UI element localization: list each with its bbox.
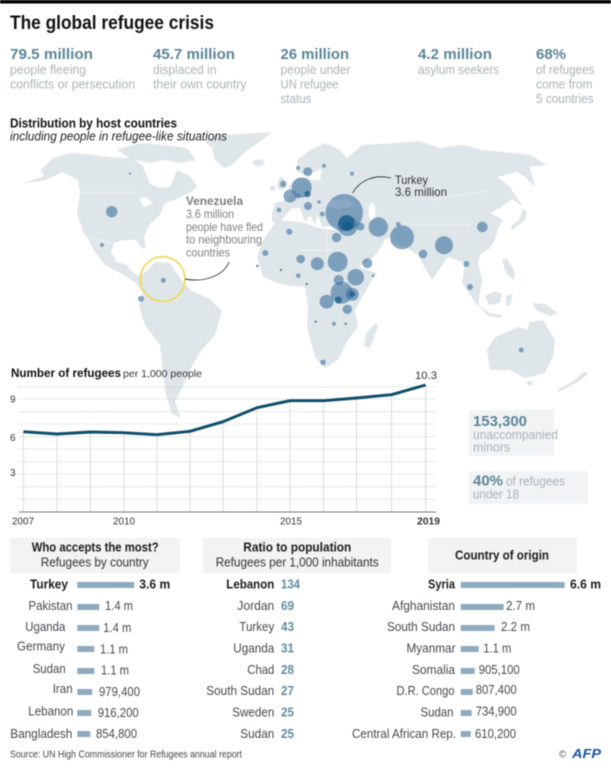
values: 807,400 [476, 683, 517, 697]
country labels: Central African Rep. [352, 727, 456, 741]
country labels: Turkey [239, 620, 275, 634]
source note: Source: UN High Commissioner for Refugees annual report [10, 750, 242, 760]
callout: unaccompanied minors: unaccompanied [473, 428, 558, 442]
ratio values: 69 [281, 599, 294, 613]
bars [77, 582, 134, 737]
callout: Venezuela text [186, 194, 263, 260]
stat: 26 million [280, 47, 350, 106]
line chart: number of refugees [10, 366, 440, 528]
ratio values: 134 [281, 578, 300, 592]
map heading: Distribution by host countries [10, 116, 177, 130]
data line [23, 385, 426, 435]
country labels [352, 578, 456, 741]
country labels: Lebanon [226, 578, 274, 592]
arrow: Venezuela leader line [185, 262, 229, 280]
values: 1.4 m [105, 599, 133, 613]
country labels: Sweden [232, 706, 274, 720]
panel heading: Who accepts the most? [32, 540, 159, 554]
values [475, 578, 601, 741]
values: 854,800 [96, 727, 137, 741]
stat: 79.5 million: people fleeing [10, 63, 86, 77]
country labels: Uganda [25, 620, 65, 634]
inland seas and borders [80, 166, 490, 262]
values: 3.6 m [139, 578, 170, 592]
panel heading: Country of origin [455, 548, 549, 562]
y axis labels: 9 [10, 394, 16, 406]
x axis labels [12, 516, 440, 528]
country labels: D.R. Congo [396, 684, 455, 698]
AFP credit: © [559, 750, 567, 760]
stat: 68%: of refugees [536, 63, 594, 77]
values: 610,200 [475, 727, 516, 741]
chart heading: Number of refugees [11, 366, 121, 380]
stat: 45.7 million: 45.7 million [153, 47, 235, 63]
callout: 40% under 18: 40% [473, 474, 503, 490]
panel: ratio to population [203, 538, 391, 741]
country labels: Myanmar [406, 642, 456, 656]
map heading: including people in refugee-like situations [10, 130, 227, 144]
stat: 45.7 million [153, 47, 247, 92]
country labels: South Sudan [387, 620, 455, 634]
country labels [206, 578, 275, 741]
values: 2.2 m [501, 620, 530, 634]
panel heading [203, 538, 391, 573]
panel heading: Ratio to population [243, 540, 351, 554]
panel: who accepts the most [10, 538, 180, 741]
title: The global refugee crisis [10, 13, 214, 34]
world map [22, 132, 588, 418]
values [96, 578, 170, 741]
stat: 79.5 million: 79.5 million [10, 47, 93, 63]
country labels: Somalia [412, 663, 455, 677]
panel heading [10, 538, 180, 573]
values: 734,900 [476, 704, 517, 718]
country labels: Bangladesh [10, 727, 72, 741]
values: 979,400 [99, 685, 140, 699]
callout: Venezuela text: Venezuela [186, 194, 243, 208]
ratio values: 25 [281, 727, 294, 741]
values: 6.6 m [570, 578, 601, 592]
arrow: Turkey leader line [353, 177, 391, 193]
values: 916,200 [98, 706, 139, 720]
map heading [10, 116, 227, 144]
ratio values: 25 [281, 706, 294, 720]
country labels: Afghanistan [392, 599, 455, 613]
stat: 26 million: status [280, 92, 312, 106]
callout: 40% under 18: of refugees [506, 474, 565, 488]
values: 1.1 m [100, 642, 128, 656]
country labels: Sudan [240, 727, 274, 741]
country labels: Syria [428, 578, 456, 592]
country labels: Turkey [30, 578, 68, 592]
x axis labels: 2010 [113, 516, 135, 528]
country labels: Uganda [233, 642, 274, 656]
country labels: Lebanon [28, 704, 73, 718]
callout: Venezuela text: 3.6 million [186, 207, 234, 221]
values: 2.7 m [506, 599, 535, 613]
stat: 4.2 million: 4.2 million [418, 47, 492, 63]
callout: Venezuela highlight circle [140, 257, 185, 301]
top black bar [0, 0, 611, 4]
values: 1.1 m [101, 664, 129, 678]
callout: Turkey text: 3.6 million [395, 185, 447, 199]
country labels: Jordan [237, 599, 274, 613]
land masses [22, 132, 588, 418]
stat: 79.5 million [10, 47, 135, 92]
chart heading: per 1,000 people [123, 368, 202, 380]
panel heading: Refugees by country [41, 556, 149, 570]
stat: 68%: 5 countries [536, 92, 594, 106]
end value label: 10.3 [415, 370, 437, 382]
callout: unaccompanied minors: minors [473, 440, 510, 454]
stat: 68%: come from [536, 78, 592, 92]
stat: 68%: 68% [536, 47, 566, 63]
x axis labels: 2007 [12, 516, 34, 528]
stat: 26 million: people under [280, 63, 350, 77]
callout: 40% under 18 [469, 471, 588, 504]
country labels: Pakistan [28, 599, 73, 613]
callout: Venezuela text: to neighbouring [186, 232, 262, 246]
stat: 26 million: 26 million [280, 47, 349, 63]
chart heading [11, 366, 202, 380]
panel: country of origin [352, 538, 601, 741]
values: 1.1 m [483, 642, 511, 656]
country labels: South Sudan [206, 684, 274, 698]
callout: Turkey text [395, 173, 447, 199]
panel heading [428, 538, 577, 573]
y axis labels [10, 394, 16, 479]
country labels: Sudan [33, 662, 66, 676]
y axis labels: 6 [10, 433, 16, 444]
stat: 68% [536, 47, 594, 106]
ratio values: 31 [281, 642, 294, 656]
ratio values [281, 578, 300, 741]
ratio values: 43 [281, 620, 294, 634]
country labels: Sudan [420, 706, 454, 720]
callout: Venezuela text: countries [186, 246, 230, 260]
stat: 45.7 million: their own country [153, 78, 247, 92]
stat: 4.2 million: asylum seekers [418, 63, 499, 77]
callout: Venezuela text: people have fled [186, 220, 263, 234]
stat: 26 million: UN refugee [280, 78, 339, 92]
callout: Turkey text: Turkey [395, 173, 428, 187]
callout: unaccompanied minors [469, 410, 558, 456]
stat: 4.2 million [418, 47, 499, 77]
ratio values: 27 [281, 684, 294, 698]
panel heading: Refugees per 1,000 inhabitants [216, 556, 379, 570]
AFP credit: AFP [571, 746, 601, 761]
y axis labels: 3 [10, 468, 16, 479]
country labels: Iran [53, 682, 73, 696]
values: 1.4 m [103, 621, 131, 635]
stat: 45.7 million: displaced in [153, 63, 217, 77]
AFP credit [559, 746, 601, 761]
country labels: Germany [17, 640, 66, 654]
ratio values: 28 [281, 663, 294, 677]
country labels [10, 578, 73, 741]
values: 905,100 [479, 663, 520, 677]
callout: 40% under 18: under 18 [473, 488, 519, 502]
stat: 79.5 million: conflicts or persecution [10, 78, 135, 92]
refugee bubbles [100, 164, 524, 365]
x axis labels: 2019 [417, 516, 440, 528]
callout: unaccompanied minors: 153,300 [473, 414, 527, 430]
bars [461, 582, 565, 737]
x axis labels: 2015 [280, 516, 302, 528]
country labels: Chad [247, 663, 274, 677]
